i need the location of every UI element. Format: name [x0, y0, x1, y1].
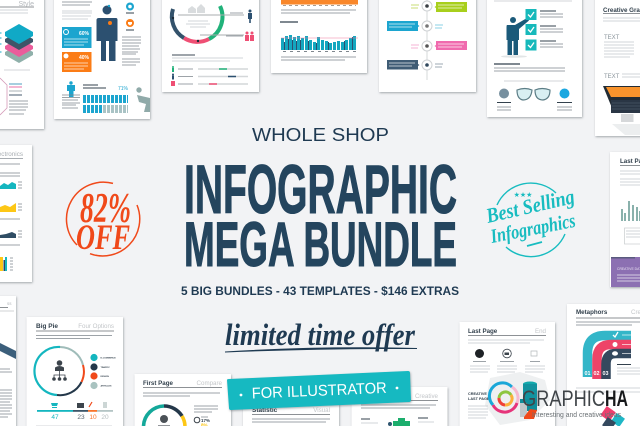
heading: Big Pie: Big Pie: [36, 323, 58, 330]
icon: laptop: [603, 86, 640, 135]
pictogram rows: [83, 99, 128, 109]
heading: Style: Style: [18, 1, 34, 8]
icon: grey person leaning: [136, 87, 150, 112]
panel: checklist and glasses page: [487, 0, 582, 117]
panel: bottom left page: [0, 296, 16, 426]
brush underline: [225, 348, 417, 352]
legend: DESIGN: [100, 376, 109, 378]
heading: Metaphors: Metaphors: [576, 309, 608, 316]
bar chart: sage bars: [621, 201, 640, 221]
icon: stacked diamonds: [5, 24, 33, 63]
legend: [90, 354, 116, 389]
icon: blue circle: [560, 88, 570, 98]
heading: Statistic: Statistic: [252, 407, 278, 414]
icon: standing person: [96, 6, 118, 61]
callout: blue: [387, 21, 420, 31]
area chart: teal: [0, 182, 16, 189]
ring chart: [172, 6, 222, 42]
icon: center person: [160, 415, 168, 423]
values: 23: [77, 414, 85, 421]
callout: navy: [387, 60, 420, 70]
panel: timeline page: [379, 0, 476, 92]
arch numbers: 02: [594, 371, 600, 377]
area chart: yellow: [0, 203, 16, 212]
ring chart: [34, 347, 84, 395]
ring chart: [144, 406, 185, 426]
panel: ring chart page: [162, 0, 259, 92]
puzzle pieces: [393, 418, 410, 426]
heading: Four Options: Four Options: [78, 323, 114, 330]
icon: pink people: [245, 32, 254, 41]
arch numbers: [584, 371, 608, 377]
diagonal band: [0, 343, 16, 359]
callout: blue 60%: 60%: [79, 31, 90, 37]
title: mega bundle: MEGA BUNDLE: [184, 210, 457, 280]
values: 20: [101, 414, 109, 421]
icon: navy person: [248, 10, 252, 23]
icon: light bubbles: [531, 351, 537, 356]
checklist boxes: [526, 9, 536, 50]
panel: stacked layers page: [0, 0, 44, 129]
timeline node 1: [422, 1, 432, 11]
stat: 71%: 71%: [118, 86, 129, 92]
badge text: infographics: Infographics: [488, 210, 578, 248]
banner text: FOR ILLUSTRATOR: [251, 380, 387, 402]
callout: pink: [434, 41, 467, 50]
script: limited time offer: limited time offer: [225, 317, 416, 352]
bar chart: colored: [0, 257, 7, 271]
timeline node 3: [422, 41, 432, 51]
values: 47: [51, 414, 59, 421]
puzzle pieces: [600, 406, 625, 426]
wordmark: HA: HA: [605, 386, 628, 411]
arch numbers: 01: [584, 371, 590, 377]
banner dot left: [240, 394, 242, 396]
heading: First Page: First Page: [143, 380, 173, 387]
icon: pointing person: [506, 17, 529, 55]
comparison rows: [171, 66, 248, 86]
orange band: [281, 0, 358, 4]
stars: ★★★: [514, 191, 532, 199]
panel: bottom left page: ss: [7, 301, 12, 306]
text label: TEXT: [604, 74, 620, 80]
tagline: Interesting and creative ideas: [532, 410, 621, 419]
icon: org chart: [52, 360, 67, 381]
small callout box: [624, 228, 640, 244]
subtitle: whole shop: WHOLE SHOP: [252, 125, 389, 145]
values: 10: [89, 414, 97, 421]
heading line two: LAST PAGE: [468, 397, 490, 401]
panel: electronics page: [0, 145, 32, 282]
timeline node 2: [422, 21, 432, 31]
wordmark: GRAPHIC: GRAPHIC: [522, 386, 605, 411]
icon: orange heart: [126, 19, 134, 27]
panel: first page: [134, 374, 231, 426]
arch numbers: 03: [602, 371, 608, 377]
segmented bar icons: [51, 402, 107, 408]
icon: glasses: [517, 88, 550, 100]
bar chart: [281, 35, 356, 50]
banner: for illustrator: [227, 371, 411, 410]
ring: [66, 182, 140, 256]
callout: green: [434, 2, 467, 12]
cylinder chart: [520, 382, 537, 419]
badge text: OFF: OFF: [76, 217, 130, 257]
arch diagram: [588, 336, 631, 379]
text label: TEXT: [604, 35, 620, 41]
watermark: graphicha logo: [489, 383, 628, 426]
icon: outlined circle: [503, 349, 511, 358]
timeline node 4: [422, 60, 432, 70]
heading: Visual: Visual: [313, 407, 330, 414]
panel: statistic page: [243, 395, 339, 426]
icon: teal person: [67, 81, 75, 97]
heading: Last Page: Last Page: [468, 328, 498, 335]
callout: orange 40%: 40%: [79, 55, 90, 61]
legend: TRAFFIC: [100, 366, 110, 369]
badge text: best selling: Best Selling: [483, 184, 577, 228]
badge: best selling infographics: [483, 183, 578, 257]
panel: metaphors page: [567, 304, 640, 426]
heading: Creative: Creative: [415, 393, 439, 400]
icon: spiral: [489, 383, 518, 412]
icon: grey circle: [499, 88, 509, 98]
panel: creative graphic page: [595, 0, 640, 136]
panel: last page right edge: [610, 152, 640, 287]
heading: End: End: [535, 328, 547, 335]
panel: bar charts page: [271, 0, 367, 73]
world map: [485, 372, 550, 425]
legend: ARTICLES: [100, 384, 112, 388]
icon: black circle: [475, 349, 484, 358]
icon: teal target: [126, 2, 134, 10]
panel: big pie page: [26, 317, 123, 426]
panel: human body page: [54, 0, 150, 119]
heading: Compare: Compare: [197, 380, 223, 387]
panel: creative page: [352, 387, 448, 426]
panel: last page bottom: [460, 322, 555, 426]
heading: creative last page: CREATIVE: [468, 392, 487, 396]
stats: 17%: [201, 418, 210, 423]
banner dot right: [396, 387, 398, 389]
segmented bar: [37, 410, 113, 412]
octagon diagram: [0, 78, 7, 115]
values: [51, 414, 109, 421]
legend: E-COMMERCE: [100, 358, 116, 360]
badge: 82% off: [66, 182, 140, 257]
badge text: 82%: 82%: [80, 186, 131, 232]
area chart: navy: [0, 232, 16, 238]
dash: [527, 242, 542, 246]
ring: [497, 183, 565, 257]
tagline: 5 BIG BUNDLES - 43 TEMPLATES - $146 EXTRAS: [181, 286, 459, 298]
